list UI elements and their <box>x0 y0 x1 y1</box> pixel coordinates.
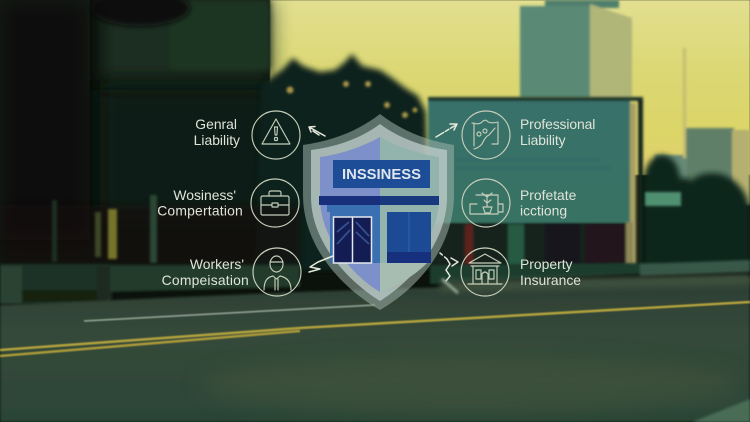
road white edge <box>692 399 750 422</box>
item: General Liability <box>194 111 325 159</box>
central shield <box>303 114 454 310</box>
road white dash <box>84 305 375 321</box>
label: Wosiness' <box>173 187 236 203</box>
right trees <box>644 155 750 268</box>
icon: person in suit <box>253 248 301 296</box>
label: icctiong <box>520 202 567 218</box>
right window <box>387 212 431 263</box>
icon: bank building <box>461 248 509 296</box>
icon: desk with plant <box>462 179 510 227</box>
icon: warning triangle <box>252 111 300 159</box>
item: Property Insurance <box>440 248 581 296</box>
arrow <box>309 126 325 136</box>
item: Professional Liability <box>436 111 595 159</box>
label: Profetate <box>520 187 576 203</box>
arrow <box>309 256 333 272</box>
label: Compertation <box>157 202 243 218</box>
shield left face <box>320 137 380 292</box>
shield outer rim <box>303 114 454 310</box>
label: Liability <box>520 132 566 148</box>
sign: INSSINESS: INSSINESS <box>342 167 421 183</box>
label: Property <box>520 256 572 272</box>
sign: INSSINESS <box>333 160 430 188</box>
shield right face <box>380 137 439 292</box>
item: Workers' Compensation (upper) <box>157 179 299 227</box>
billboard faint lettering <box>455 160 610 168</box>
arrow <box>440 253 450 281</box>
label: Compeisation <box>162 272 249 288</box>
label: Genral <box>195 116 237 132</box>
road yellow line <box>0 302 750 356</box>
road <box>0 277 750 422</box>
icon: professional scene <box>462 111 510 159</box>
icon: briefcase <box>251 179 299 227</box>
item: Workers' Compensation <box>162 248 333 296</box>
storefront left panel <box>327 205 380 263</box>
label: Workers' <box>190 256 244 272</box>
awning band <box>319 196 380 205</box>
low wall <box>0 260 750 304</box>
distant towers <box>520 0 750 205</box>
item: Profetate icctiong <box>462 179 577 227</box>
label: Liability <box>194 132 240 148</box>
sky <box>269 0 750 175</box>
storefront band <box>428 222 633 266</box>
left building <box>0 0 300 270</box>
arrow <box>436 125 456 137</box>
tree behind shield <box>255 54 430 270</box>
label: Professional <box>520 116 595 132</box>
shield inner light ring <box>311 124 447 301</box>
bokeh spots <box>286 81 418 118</box>
shield lower right face <box>380 263 427 292</box>
label: Insurance <box>520 272 581 288</box>
left window <box>334 217 372 263</box>
bollards and posts <box>52 192 681 263</box>
billboard <box>428 97 643 270</box>
